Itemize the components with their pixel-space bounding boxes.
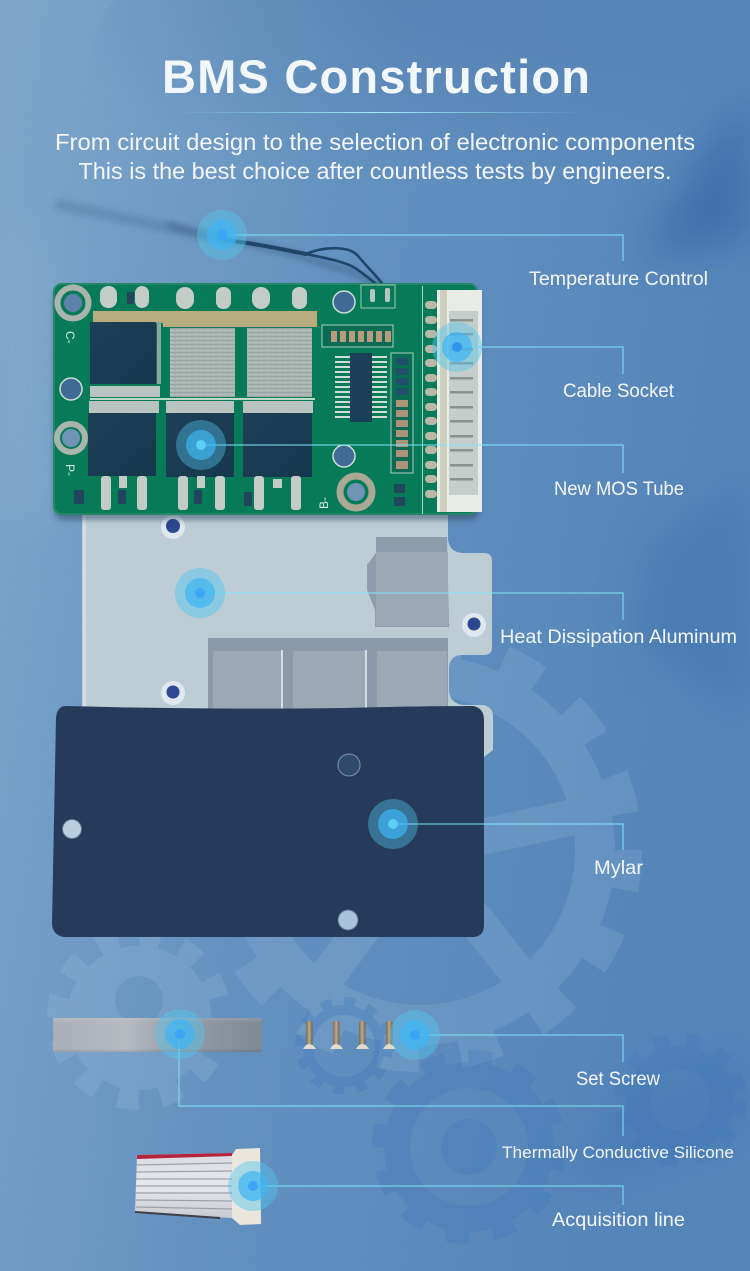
title: BMS Construction: [162, 50, 590, 103]
component column: [391, 353, 413, 473]
callout: Set Screw: [390, 1010, 660, 1090]
thermal pads: lower row: [208, 638, 448, 711]
callout: Heat Dissipation Aluminum: Heat Dissipation Aluminum: [500, 627, 737, 648]
callout: Heat Dissipation Aluminum: [175, 568, 737, 648]
gear: far right blue gear: [620, 1040, 740, 1160]
callout: Cable Socket: Cable Socket: [563, 381, 675, 402]
subtitle: From circuit design to the selection of electronic components: [55, 129, 695, 155]
callout: Thermally Conductive Silicone: [155, 1009, 734, 1162]
callout: New MOS Tube: New MOS Tube: [554, 479, 684, 500]
thermal pad: upper right: [367, 537, 449, 627]
subtitle: This is the best choice after countless tests by engineers.: [78, 158, 672, 184]
small transistors: [394, 484, 405, 506]
gold bus bar: [93, 311, 317, 327]
set screws: [303, 1021, 396, 1049]
silkscreen marks: [63, 331, 331, 509]
MOS tubes bottom row: [88, 401, 313, 477]
callout: Cable Socket: [432, 322, 675, 402]
callout: Acquisition line: [228, 1161, 685, 1231]
title rule: [172, 112, 584, 113]
callout: Thermally Conductive Silicone: Thermally Conductive Silicone: [502, 1143, 734, 1162]
MOS tubes top row: [90, 322, 312, 397]
silkscreen marks: P-: [63, 464, 77, 476]
silicone strip: [53, 1018, 262, 1052]
circuit board: [53, 283, 482, 520]
gear: small blue gear behind screws: [300, 1002, 388, 1090]
callout: Set Screw: Set Screw: [576, 1069, 660, 1090]
bottom legs: [74, 476, 301, 510]
cable connector: [232, 1148, 261, 1225]
subtitle: [55, 129, 695, 184]
callout: New MOS Tube: [176, 420, 684, 500]
top solder pads: [100, 286, 307, 309]
mylar sheet: [52, 706, 484, 937]
mylar holes: [338, 754, 360, 776]
white wire socket: [422, 286, 482, 514]
aluminum plate: [82, 510, 493, 757]
gear: large blue gear bottom right: [381, 1059, 557, 1235]
resistor pack: [322, 325, 393, 347]
silkscreen marks: C-: [63, 331, 77, 344]
aluminum heat sink: [82, 510, 493, 757]
mounting holes and corner pads: [57, 288, 372, 508]
green trace between tubes: [90, 398, 315, 400]
acquisition cable: [135, 1148, 261, 1225]
control IC: [335, 353, 387, 422]
callout: Acquisition line: Acquisition line: [552, 1210, 685, 1231]
silkscreen marks: B-: [317, 497, 331, 509]
gear: large pale background gear: [212, 642, 628, 1058]
callout: Temperature Control: Temperature Control: [529, 269, 708, 290]
temperature sensor wire: [60, 205, 384, 286]
sensor solder block: [361, 285, 395, 308]
callout: Mylar: Mylar: [594, 858, 644, 879]
callout: Temperature Control: [197, 210, 708, 290]
callout: Mylar: [368, 799, 644, 879]
screw holes: [161, 515, 486, 705]
gear: left pale gear: [57, 936, 221, 1100]
connector pins: [425, 301, 437, 498]
